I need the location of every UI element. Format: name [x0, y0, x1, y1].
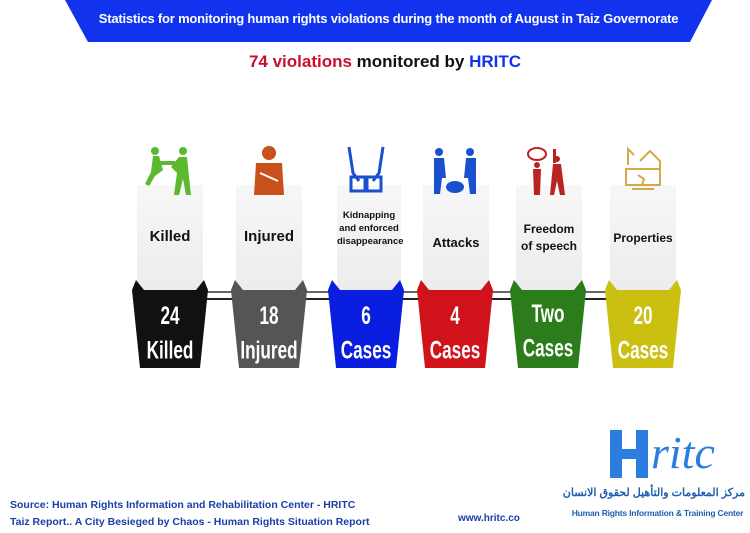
subtitle: 74 violations monitored by HRITC — [249, 52, 521, 71]
column: freedom of speech — [510, 147, 586, 368]
card — [337, 185, 401, 293]
column: attacks — [417, 148, 493, 368]
logo: ritc — [651, 427, 715, 478]
bucket — [417, 280, 493, 368]
source text: Taiz Report.. A City Besieged by Chaos - Human Rights Situation Report — [10, 516, 370, 528]
column: killed — [132, 147, 208, 368]
title banner: Statistics for monitoring human rights violations during the month of August in Taiz Governorate — [99, 11, 678, 26]
icon: injured person — [254, 146, 284, 195]
card: Properties — [613, 231, 673, 245]
column: injured: Injured — [240, 335, 298, 364]
logo: مركز المعلومات والتأهيل لحقوق الانسان — [563, 487, 745, 499]
bucket — [605, 280, 681, 368]
card — [610, 185, 676, 293]
source text — [10, 499, 370, 528]
icon: damaged house — [625, 146, 661, 190]
icon: speech — [527, 147, 565, 195]
card: and enforced — [339, 223, 399, 234]
icon: fight — [145, 147, 191, 195]
card: Freedom — [524, 222, 574, 236]
card: Injured — [244, 228, 294, 245]
icon: attack — [434, 148, 476, 194]
column: freedom of speech: Cases — [523, 333, 573, 362]
card — [137, 185, 203, 293]
bucket — [328, 280, 404, 368]
connecting line — [133, 291, 680, 300]
card: Kidnapping — [343, 210, 395, 221]
logo: Human Rights Information & Training Center — [572, 508, 743, 518]
card — [236, 185, 302, 293]
column: properties: 20 — [633, 301, 653, 330]
column: injured — [231, 146, 307, 368]
card: of speech — [521, 239, 577, 253]
column: injured: 18 — [259, 301, 279, 330]
card: disappearance — [337, 236, 404, 247]
bucket — [231, 280, 307, 368]
source text: Source: Human Rights Information and Rehabilitation Center - HRITC — [10, 499, 355, 511]
title banner — [65, 0, 712, 42]
card — [516, 185, 582, 293]
column: kidnapping — [328, 146, 404, 368]
column: freedom of speech: Two — [531, 299, 565, 328]
column: properties — [605, 146, 681, 368]
column: kidnapping: 6 — [361, 301, 371, 330]
card: Attacks — [433, 235, 479, 250]
column: attacks: Cases — [430, 335, 480, 364]
column: killed: 24 — [160, 301, 180, 330]
icon: cuffed hands — [348, 146, 384, 192]
bucket — [132, 280, 208, 368]
website: www.hritc.co — [458, 513, 520, 524]
logo — [563, 427, 745, 518]
column: properties: Cases — [618, 335, 668, 364]
column: attacks: 4 — [450, 301, 460, 330]
card — [423, 185, 489, 293]
card: Killed — [150, 228, 190, 245]
column: kidnapping: Cases — [341, 335, 391, 364]
bucket — [510, 280, 586, 368]
column: killed: Killed — [147, 335, 193, 364]
